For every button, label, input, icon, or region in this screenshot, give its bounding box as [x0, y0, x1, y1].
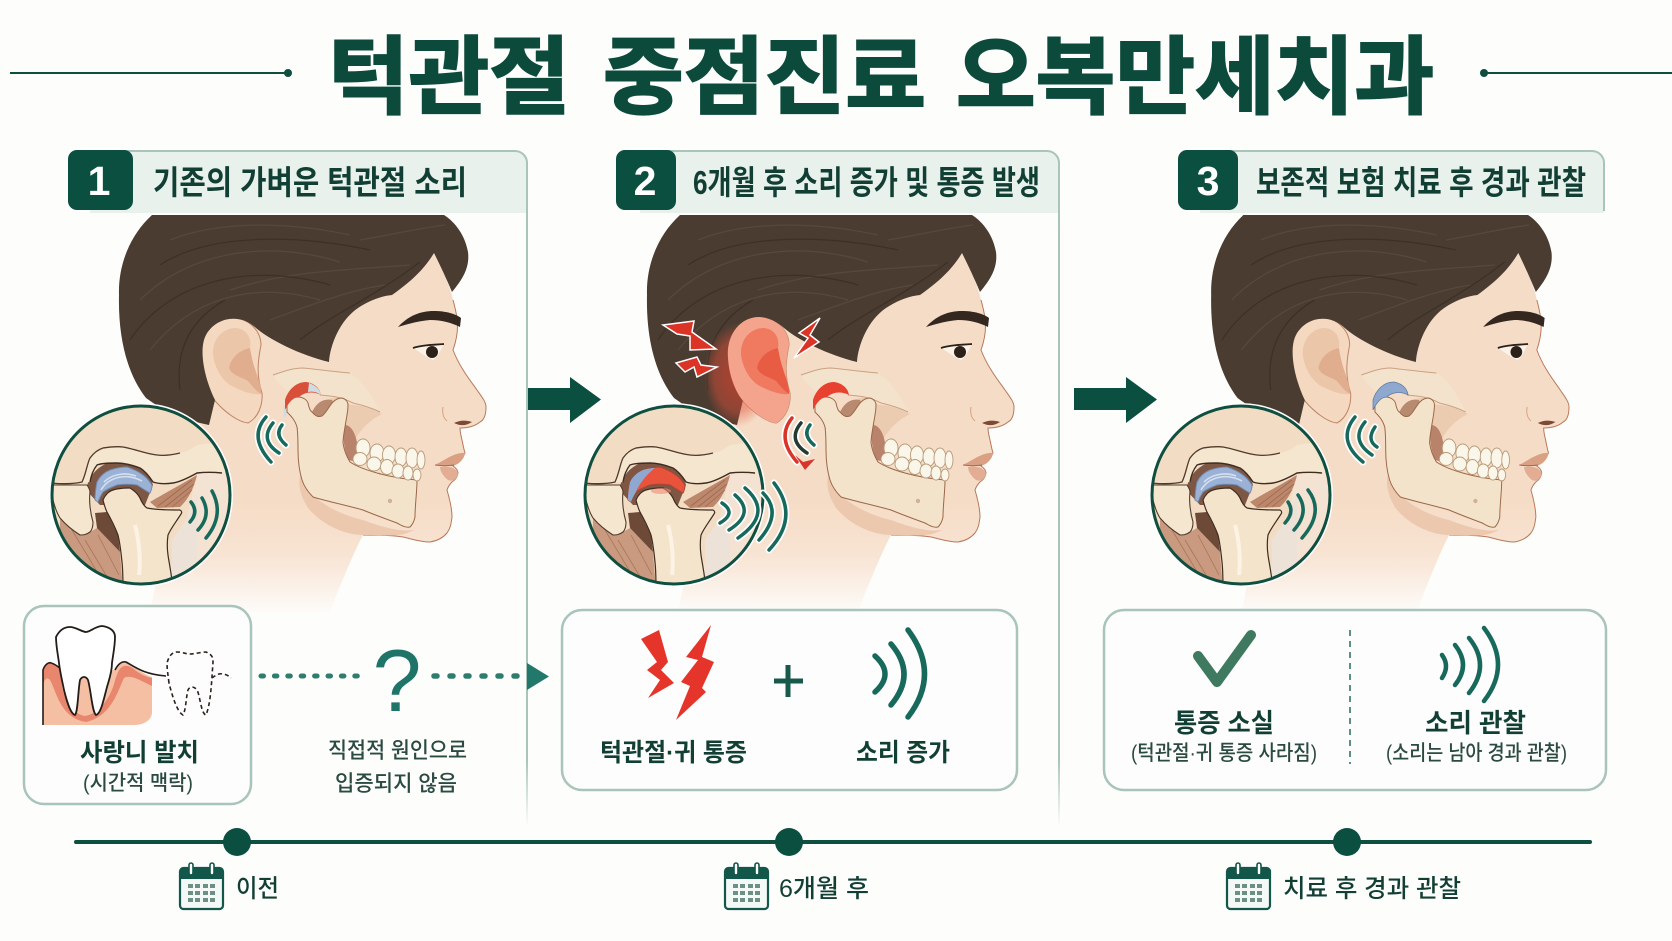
dotted link with question mark: ?	[373, 631, 421, 730]
step 3 header: 3	[1197, 158, 1219, 204]
step 3 header: 보존적 보험 치료 후 경과 관찰	[1256, 164, 1586, 201]
panel: step 1	[24, 150, 549, 827]
step 2 header: 2	[634, 158, 656, 204]
arrow: step 2 to 3	[1074, 377, 1157, 423]
wisdom tooth box: 사랑니 발치	[80, 739, 199, 767]
note: not proven cause: 입증되지 않음	[335, 771, 457, 796]
outcome box: (턱관절·귀 통증 사라짐)	[1131, 742, 1317, 765]
timeline node: treatment	[1333, 828, 1361, 856]
dotted link with question mark	[261, 631, 549, 730]
title: 오복만세치과	[956, 31, 1434, 126]
outcome box: 소리 관찰	[1425, 708, 1526, 738]
title left ornament	[10, 69, 292, 77]
icon: calendar six months	[725, 863, 768, 909]
pain glow	[704, 323, 772, 427]
icon: pain bolts	[641, 625, 714, 720]
wisdom tooth box: (시간적 맥락)	[83, 772, 193, 795]
icon: remaining sound waves	[1442, 628, 1498, 701]
icon: check mark	[1198, 635, 1251, 682]
timeline	[76, 828, 1590, 909]
icon: extracted tooth and gum	[43, 626, 231, 725]
outcome box: (소리는 남아 경과 관찰)	[1386, 742, 1567, 765]
label: after treatment: 치료 후 경과 관찰	[1283, 875, 1461, 903]
pain bolts	[663, 318, 820, 377]
joint close-up circle	[49, 400, 233, 590]
icon: calendar before	[180, 863, 223, 909]
title right ornament	[1480, 69, 1672, 77]
symptoms box: 턱관절·귀 통증	[600, 739, 747, 767]
note: not proven cause	[328, 738, 467, 796]
icon: sound waves	[875, 630, 924, 717]
joint close-up circle	[1149, 400, 1333, 590]
step 1 header	[68, 150, 527, 827]
symptoms box: 소리 증가	[856, 739, 950, 767]
icon: calendar treatment	[1227, 863, 1270, 909]
illustration: head after treatment	[1211, 215, 1569, 612]
plus sign	[774, 665, 803, 697]
title: 턱관절	[328, 31, 570, 126]
title: 중점진료	[603, 31, 926, 126]
symptoms box	[562, 610, 1017, 790]
outcome box: 통증 소실	[1174, 708, 1274, 738]
joint close-up circle	[582, 400, 786, 590]
panel: step 2	[562, 150, 1059, 827]
step 1 header: 1	[88, 158, 110, 204]
arrow: step 1 to 2	[528, 377, 601, 423]
timeline node: six months	[775, 828, 803, 856]
step 2 header	[616, 150, 1059, 827]
label: before: 이전	[236, 875, 279, 903]
step 1 header: 기존의 가벼운 턱관절 소리	[153, 164, 467, 201]
illustration: head with jaw joint	[119, 215, 486, 612]
step 2 header: 6개월 후 소리 증가 및 통증 발생	[693, 164, 1040, 201]
note: not proven cause: 직접적 원인으로	[328, 738, 467, 763]
illustration: head with ear pain	[647, 215, 1014, 612]
wisdom tooth box	[24, 606, 251, 804]
step 3 header	[1178, 150, 1604, 213]
title	[328, 31, 1434, 126]
outcome box	[1104, 610, 1606, 790]
timeline node: before	[223, 828, 251, 856]
panel: step 3	[1104, 150, 1606, 790]
label: six months: 6개월 후	[779, 875, 869, 903]
